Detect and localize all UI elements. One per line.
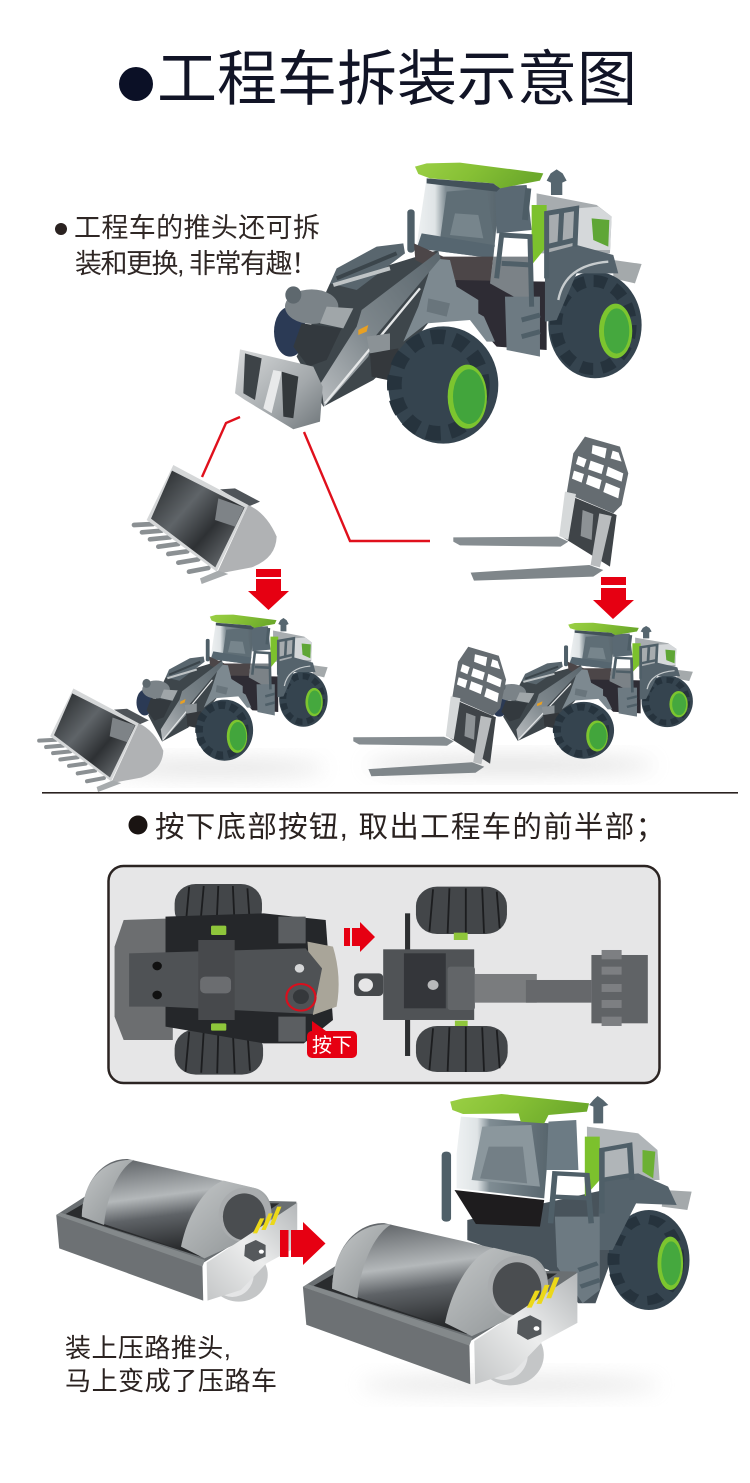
vehicle: loader with pusher head bbox=[235, 163, 642, 444]
divider bbox=[42, 792, 738, 794]
text block: roller note: 马上变成了压路车 bbox=[65, 1366, 277, 1396]
roller attachment, detached bbox=[56, 1159, 297, 1302]
text block: roller note bbox=[65, 1333, 277, 1396]
connector lines bbox=[202, 417, 430, 541]
badge: press bbox=[307, 1021, 357, 1058]
text block: attachment note bbox=[55, 213, 320, 279]
attachment: fork bbox=[453, 437, 628, 581]
text block: roller note: 装上压路推头, bbox=[65, 1333, 231, 1363]
title: 工程车拆装示意图 bbox=[157, 46, 637, 113]
photo: vehicle front half underside bbox=[354, 887, 648, 1072]
arrow: down to fork loader bbox=[593, 577, 634, 619]
badge: press: 按下 bbox=[312, 1034, 352, 1057]
arrow: down to bucket loader bbox=[248, 569, 289, 610]
arrow: install roller bbox=[280, 1222, 326, 1265]
text block: attachment note: 工程车的推头还可拆 bbox=[74, 213, 320, 243]
text block: attachment note: 装和更换, 非常有趣！ bbox=[75, 249, 318, 279]
vehicle: road roller bbox=[303, 1094, 692, 1395]
panel: underside view bbox=[108, 866, 660, 1083]
loader with fork bbox=[353, 623, 693, 776]
photo: vehicle rear half underside bbox=[115, 884, 339, 1075]
arrow: separate bbox=[344, 922, 375, 952]
heading: step instruction: 按下底部按钮, 取出工程车的前半部； bbox=[155, 811, 665, 844]
loader with bucket bbox=[39, 615, 328, 792]
attachment: bucket bbox=[134, 465, 277, 584]
